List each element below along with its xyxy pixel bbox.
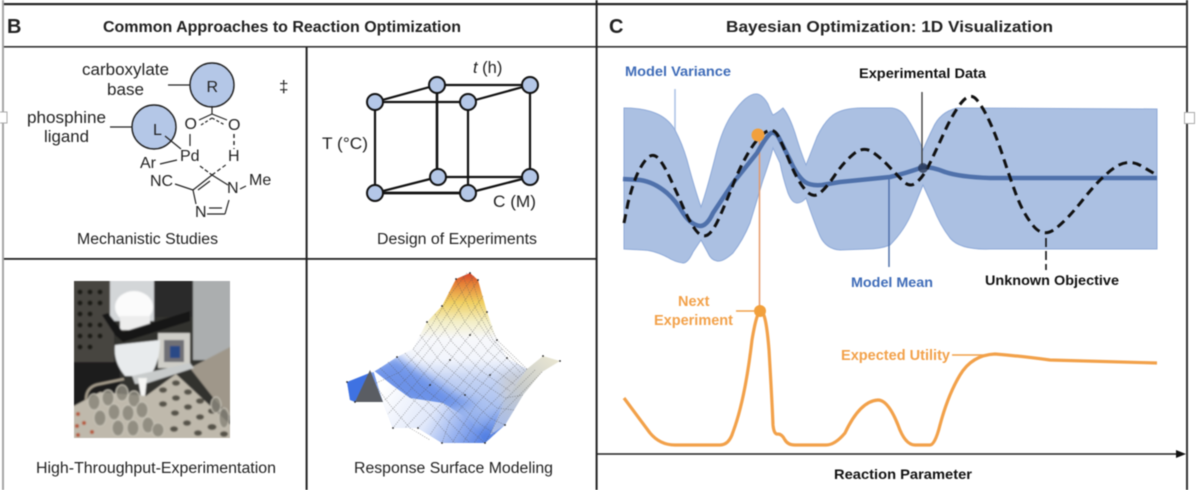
label: carboxylate base: carboxylate xyxy=(82,61,169,79)
panel: design of experiments xyxy=(322,59,538,248)
icon: phosphine ligand circle L xyxy=(110,105,176,149)
x axis label: Reaction Parameter xyxy=(834,466,973,482)
curve: model mean xyxy=(623,133,1157,226)
icon: carboxylate base circle R xyxy=(168,63,234,107)
photo: robotic dispenser over vial plate xyxy=(70,277,234,442)
axis label: concentration: C (M) xyxy=(493,193,536,211)
leader: next experiment horizontal xyxy=(736,310,755,312)
leader: expected utility xyxy=(952,354,985,356)
label: phosphine ligand xyxy=(27,109,106,146)
panel letter B: B xyxy=(7,16,21,38)
molecule atoms: Pd xyxy=(180,148,200,165)
left resize handle xyxy=(0,112,7,123)
molecule atoms: O xyxy=(228,117,240,134)
caption: design of experiments: Design of Experiments xyxy=(377,231,537,248)
x axis arrow xyxy=(597,450,1186,458)
molecule atoms: N xyxy=(227,180,239,197)
molecule bonds xyxy=(160,106,246,214)
icon: phosphine ligand circle L: L xyxy=(153,122,162,139)
panel: mechanistic studies xyxy=(27,61,288,248)
leader: model variance xyxy=(674,89,676,132)
chart: 3D response surface xyxy=(345,272,561,445)
curve: expected utility xyxy=(624,311,1157,445)
label: unknown objective: Unknown Objective xyxy=(985,272,1119,288)
caption: high-throughput experimentation: High-Throughput-Experimentation xyxy=(36,460,276,477)
panel: high-throughput experimentation xyxy=(36,277,276,477)
label: model variance: Model Variance xyxy=(625,63,731,79)
leader: next experiment vertical xyxy=(758,135,760,311)
molecule atoms: H xyxy=(228,148,240,165)
molecule atoms: N xyxy=(195,204,207,221)
caption: response surface modeling: Response Surface Modeling xyxy=(354,460,553,477)
label: phosphine ligand: ligand xyxy=(44,128,89,146)
label: expected utility: Expected Utility xyxy=(841,348,950,364)
curve: unknown objective xyxy=(624,96,1155,236)
model variance band xyxy=(624,94,1157,263)
label: transition state mark: ‡ xyxy=(279,77,288,96)
molecule atoms: O xyxy=(184,116,197,133)
cube diagram xyxy=(367,77,538,201)
axis label: temperature: T (°C) xyxy=(322,135,368,153)
molecule atoms: NC xyxy=(150,173,173,190)
caption: mechanistic studies: Mechanistic Studies xyxy=(77,231,218,248)
label: experimental data: Experimental Data xyxy=(859,65,986,81)
label: carboxylate base: base xyxy=(107,81,144,99)
molecule atoms: Me xyxy=(249,172,271,189)
marker: sampled point on model xyxy=(752,128,764,142)
label: carboxylate base xyxy=(82,61,169,99)
molecule atoms: Ar xyxy=(140,155,157,172)
marker: next experiment xyxy=(754,305,766,317)
data point: experimental data xyxy=(918,163,928,173)
leader: model mean xyxy=(888,177,890,267)
panel: bayesian optimization chart xyxy=(597,63,1186,482)
label: next experiment: Next xyxy=(678,294,710,310)
label: model mean: Model Mean xyxy=(851,274,933,290)
right resize handle xyxy=(1184,112,1194,124)
label: next experiment: Experiment xyxy=(654,313,733,329)
heading: common approaches: Common Approaches to Reaction Optimization xyxy=(103,19,461,36)
leader: experimental data xyxy=(921,92,923,165)
axis label: time: t (h) xyxy=(473,59,502,77)
panel: response surface modeling xyxy=(345,272,561,477)
panel letter C: C xyxy=(609,16,623,38)
leader: unknown objective xyxy=(1045,238,1047,270)
label: phosphine ligand: phosphine xyxy=(27,109,106,127)
heading: bayesian optimization: Bayesian Optimization: 1D Visualization xyxy=(726,19,1053,36)
molecule atoms xyxy=(140,116,271,221)
icon: carboxylate base circle R: R xyxy=(206,79,218,96)
